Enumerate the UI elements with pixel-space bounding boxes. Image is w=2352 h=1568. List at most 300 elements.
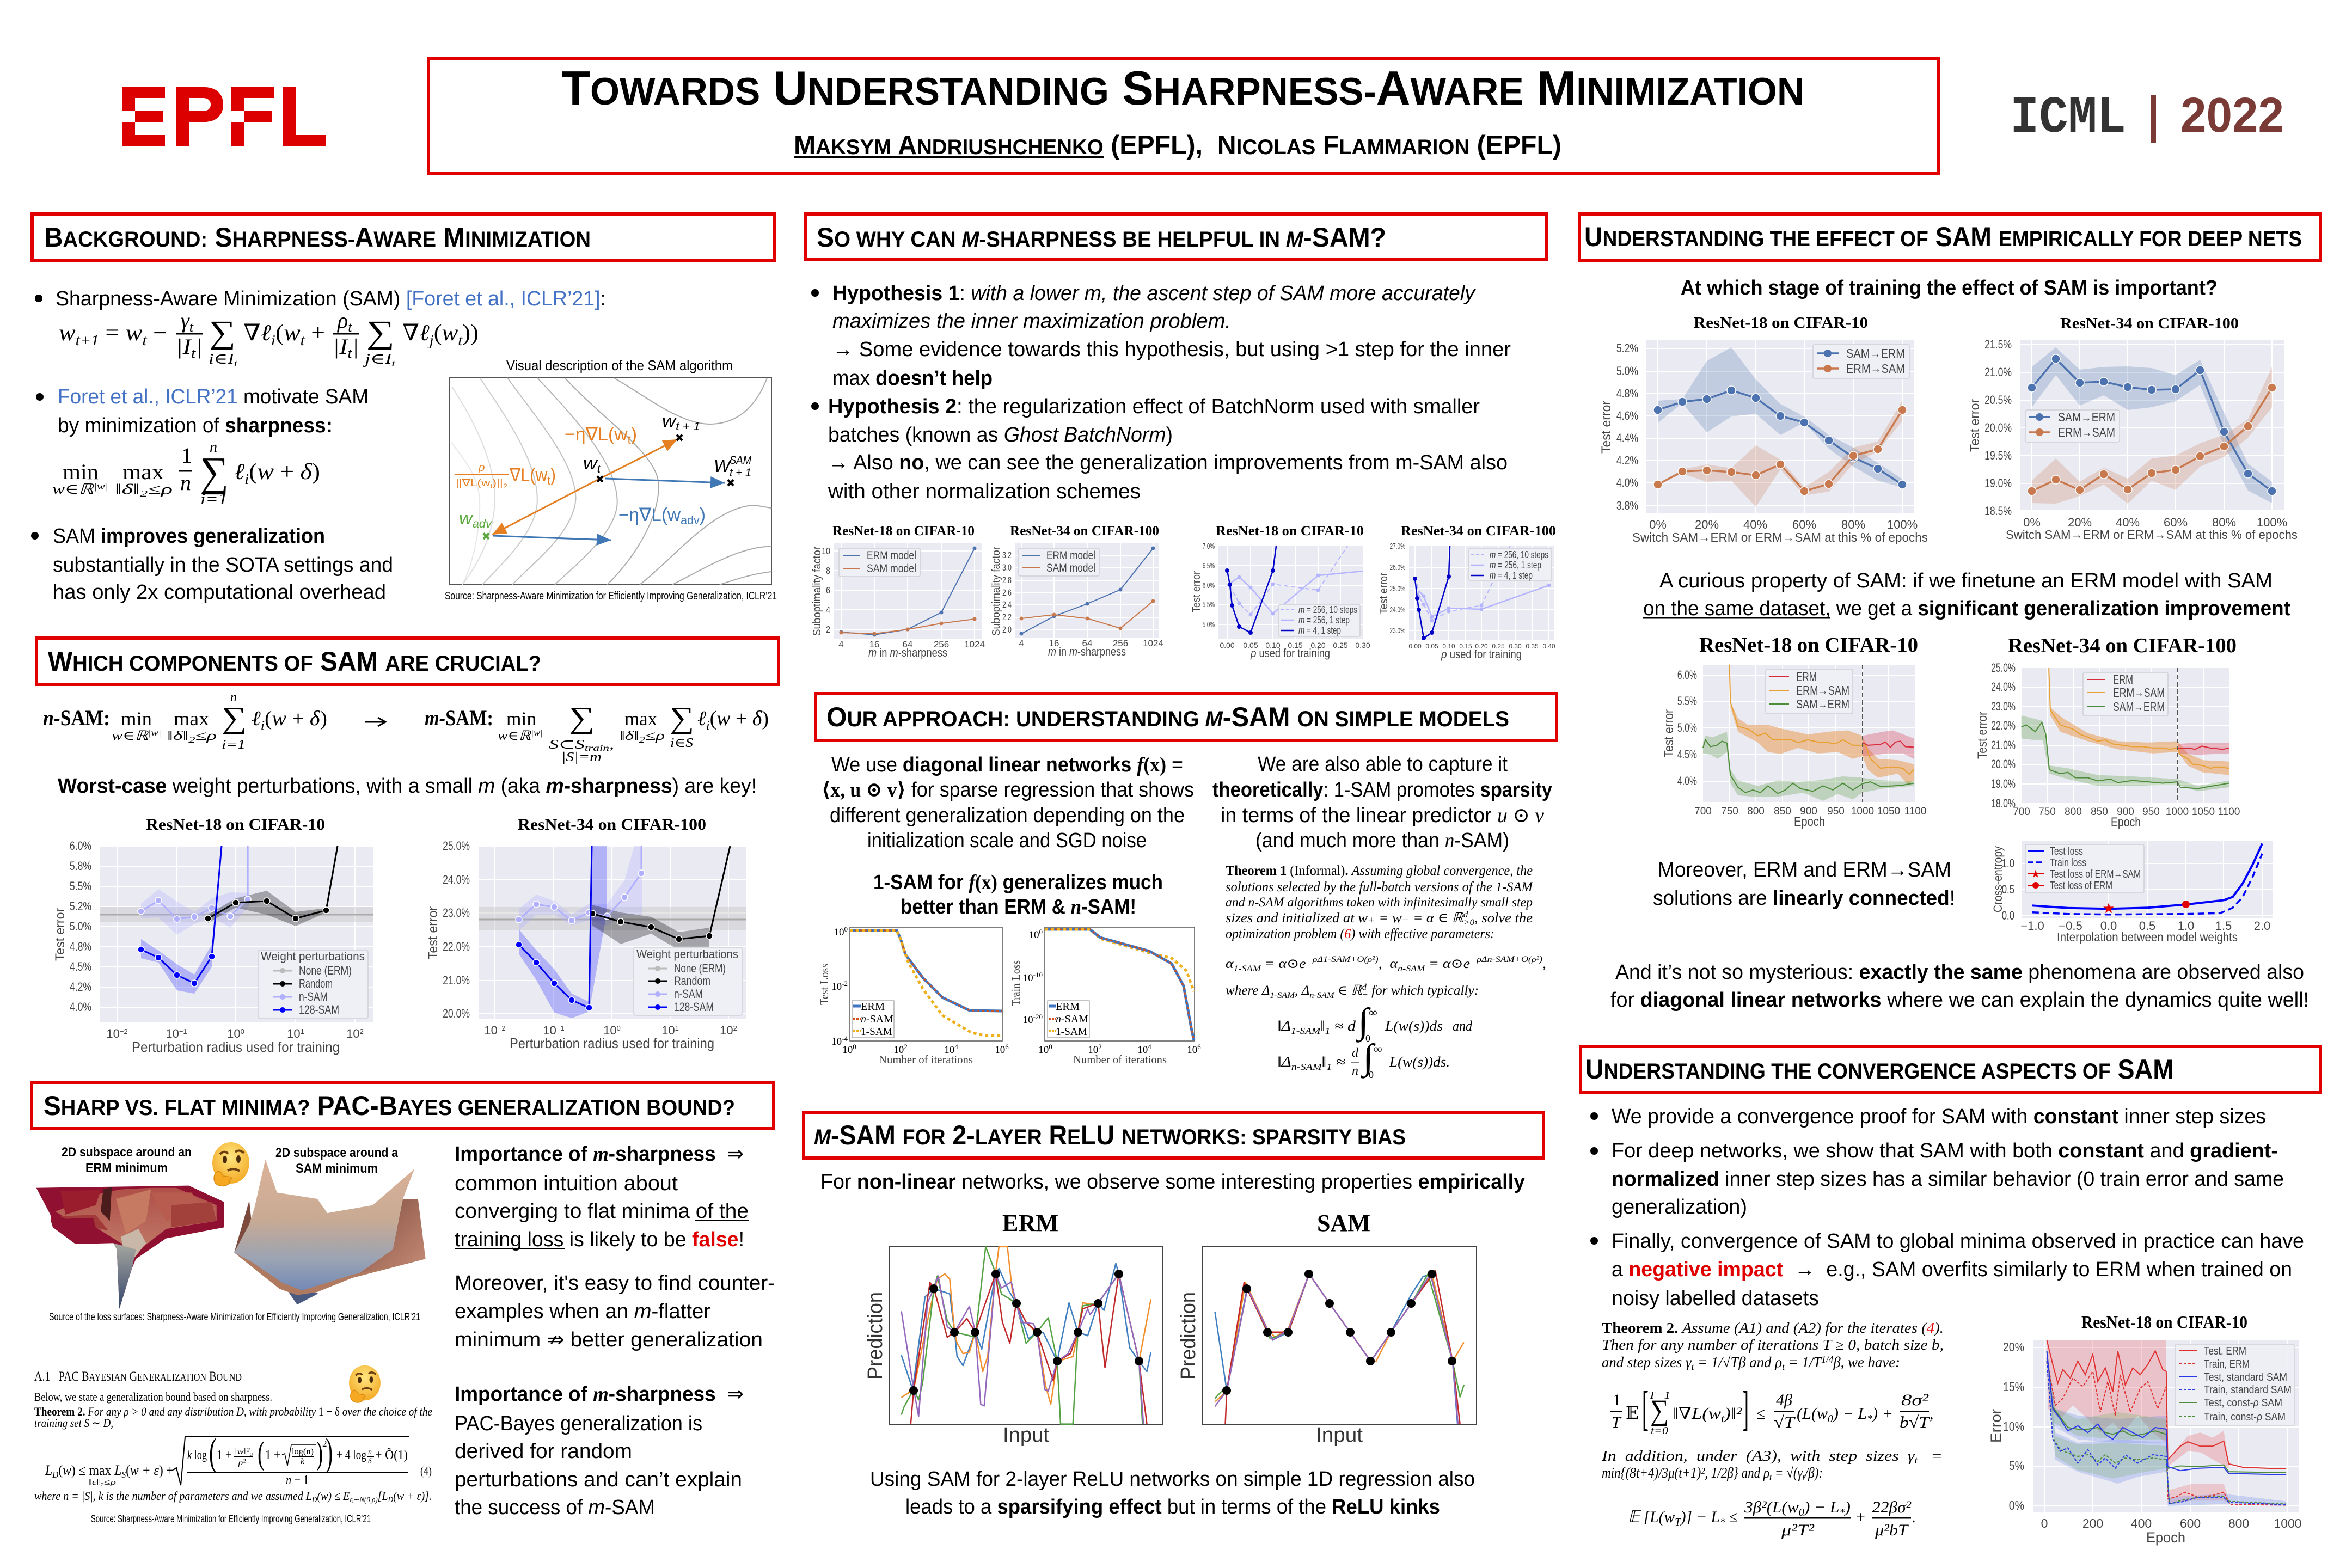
chart: test error vs perturbation radius, ResNet-18: 2 bbox=[360, 1027, 364, 1036]
formula: n-SAM: min bbox=[121, 708, 152, 730]
chart: train loss: -10 bbox=[1033, 971, 1043, 979]
chart: test error vs perturbation radius, ResNet-34: 10 bbox=[603, 1024, 617, 1037]
chart: rho vs test error ResNet-18: 7.0% bbox=[1203, 542, 1215, 551]
theorem: PAC-Bayes bound: (4) bbox=[420, 1464, 432, 1478]
chart: finetuning ResNet-34: 750 bbox=[2038, 806, 2056, 818]
formula: m-SAM: m-SAM: bbox=[425, 706, 493, 730]
text: hypothesis 2: batches (known as Ghost BatchNorm) bbox=[828, 424, 1173, 446]
formula: SAM update: t bbox=[189, 319, 194, 335]
chart: finetuning ResNet-34: 19.0% bbox=[1991, 778, 2016, 791]
bullet: negative impact: a negative impact → e.g., SAM overfits similarly to ERM when trained on bbox=[1612, 1258, 2292, 1281]
icon: thinking emoji bbox=[212, 1142, 249, 1186]
chart: cross-entropy interpolation: 0.5 bbox=[2002, 883, 2014, 897]
formula: 1-SAM integral: and bbox=[1453, 1018, 1473, 1034]
chart: test error vs perturbation radius, ResNet-18: 10 bbox=[287, 1027, 301, 1040]
arrow: gradient toward w_adv bbox=[492, 479, 600, 535]
legend: SAM→ERM bbox=[2113, 700, 2165, 714]
legend: ERM→SAM bbox=[1796, 683, 1849, 697]
theorem 1: >0 bbox=[1463, 917, 1474, 927]
chart: switch point ResNet-18: 4.4% bbox=[1616, 432, 1638, 445]
formula: SAM update: j∈I bbox=[365, 351, 384, 367]
text: generalization claim: better than ERM & n-SAM! bbox=[901, 896, 1136, 918]
chart: test error vs perturbation radius, ResNet-34: 23.0% bbox=[443, 906, 470, 920]
legend: n-SAM bbox=[299, 990, 328, 1003]
chart: switch point ResNet-18: 60% bbox=[1792, 518, 1816, 531]
chart: suboptimality ResNet-34: 3.2 bbox=[1002, 550, 1012, 561]
labels: ||∇L(w bbox=[456, 477, 483, 488]
formula: 1-SAM integral bbox=[1277, 1001, 1473, 1044]
panel: understanding effect empirically bbox=[1579, 214, 2320, 1012]
legend bbox=[258, 950, 368, 1019]
formula: SAM update: w bbox=[59, 321, 74, 346]
chart: suboptimality ResNet-34 bbox=[990, 524, 1163, 658]
chart: switch point ResNet-18: 4.8% bbox=[1616, 387, 1638, 401]
theorem 1: Theorem 1 (Informal). Assuming global convergence, the bbox=[1226, 863, 1533, 878]
theorem 1: = α⊙e bbox=[1261, 957, 1306, 971]
chart title: ResNet-34 on CIFAR-100 bbox=[1010, 524, 1159, 538]
chart: test error vs perturbation radius, ResNet-18: 10 bbox=[166, 1027, 179, 1040]
formula: m-SAM: S⊂S bbox=[549, 738, 573, 752]
chart: switch point ResNet-34: 20.0% bbox=[1984, 421, 2012, 435]
theorem: PAC-Bayes bound: training set S ∼ D, bbox=[34, 1416, 113, 1430]
text: linearly connected bbox=[1653, 859, 1955, 910]
formula: m-SAM: |w| bbox=[531, 728, 543, 738]
panel: convergence aspects bbox=[1581, 1046, 2320, 1546]
formula: 1-SAM integral: L(w(s))ds bbox=[1385, 1018, 1443, 1034]
labels: −η∇L(w bbox=[618, 505, 682, 525]
theorem 2: = bbox=[1918, 1448, 1943, 1464]
chart: noisy labels error: 5% bbox=[2009, 1459, 2024, 1473]
title: TOWARDS UNDERSTANDING SHARPNESS-AWARE MINIMIZATION bbox=[561, 61, 1804, 115]
chart title: ResNet-34 on CIFAR-100 bbox=[1401, 524, 1556, 538]
chart: test error vs perturbation radius, ResNet-34: 2 bbox=[733, 1024, 737, 1032]
chart: test loss: 10 bbox=[842, 1044, 853, 1056]
chart: test error vs perturbation radius, ResNet-34: 10 bbox=[661, 1024, 675, 1037]
legend: m = 256, 1 step bbox=[1490, 560, 1541, 571]
chart: switch point ResNet-18: Test error bbox=[1599, 401, 1614, 454]
bullet: deep networks: For deep networks, we show that SAM with both constant and gradient- bbox=[1612, 1140, 2278, 1162]
chart: switch point ResNet-18: 100% bbox=[1887, 518, 1918, 531]
chart: noisy labels error: 600 bbox=[2180, 1516, 2201, 1530]
caption: SAM: 2D subspace around a bbox=[275, 1146, 399, 1160]
theorem: PAC-Bayes bound: L bbox=[45, 1462, 53, 1478]
chart: rho vs test error ResNet-18 bbox=[1191, 524, 1370, 660]
text: hypothesis 2: Hypothesis 2: the regularization effect of BatchNorm used with smaller bbox=[828, 395, 1480, 418]
chart: suboptimality ResNet-34: 1024 bbox=[1143, 638, 1163, 648]
formula: expected gradient bound: 4β bbox=[1776, 1391, 1792, 1409]
legend: SAM model bbox=[1046, 562, 1095, 574]
bullet: negative impact: noisy labelled datasets bbox=[1612, 1287, 1819, 1310]
chart: switch point ResNet-18: 5.2% bbox=[1616, 342, 1638, 356]
chart title: ResNet-18 on CIFAR-10 bbox=[2081, 1312, 2247, 1332]
theorem 2: t bbox=[1692, 1361, 1695, 1372]
chart: cross-entropy interpolation: −0.5 bbox=[2059, 919, 2082, 933]
theorem: PAC-Bayes bound: D bbox=[311, 1496, 317, 1504]
theorem: PAC-Bayes bound: D bbox=[388, 1496, 394, 1504]
chart: test loss: -4 bbox=[842, 1034, 848, 1043]
chart: test loss: 10 bbox=[944, 1044, 954, 1056]
theorem 1: , solve the bbox=[1474, 911, 1533, 926]
theorem 2: and step sizes γ bbox=[1602, 1354, 1692, 1370]
legend: ERM bbox=[861, 1001, 885, 1013]
legend: Test, standard SAM bbox=[2204, 1371, 2287, 1383]
chart: finetuning ResNet-34: 1100 bbox=[2218, 806, 2240, 818]
formula: sharpness minimization: ≤ρ bbox=[148, 481, 173, 497]
legend bbox=[634, 947, 742, 1015]
chart: switch point ResNet-18: 20% bbox=[1695, 518, 1719, 531]
text: sparsifying effect: leads to a sparsifying effect but in terms of the ReLU kinks bbox=[905, 1496, 1440, 1518]
legend bbox=[1019, 548, 1099, 576]
theorem 2: t bbox=[1782, 1361, 1785, 1372]
chart: test error vs perturbation radius, ResNet-34: 10 bbox=[720, 1024, 733, 1037]
panel: our approach bbox=[816, 694, 1557, 1080]
chart: finetuning ResNet-34: 700 bbox=[2013, 806, 2030, 818]
chart: rho vs test error ResNet-34: 0.10 bbox=[1442, 642, 1455, 650]
formula: expected gradient bound: 0 bbox=[1828, 1413, 1833, 1425]
formula: n-SAM integral: n bbox=[1352, 1064, 1358, 1078]
chart: test error vs perturbation radius, ResNet-18: 5.8% bbox=[70, 860, 91, 873]
text: importance of m-sharpness, flat minima: common intuition about bbox=[455, 1172, 678, 1195]
chart: train loss: -20 bbox=[1033, 1013, 1043, 1021]
chart: test error vs perturbation radius, ResNet-18: 5.5% bbox=[70, 880, 91, 893]
text: importance of m-sharpness, PAC-Bayes: derived for random bbox=[455, 1440, 632, 1463]
formula: sharpness minimization: ( bbox=[249, 460, 258, 485]
chart title: SAM bbox=[1317, 1210, 1370, 1236]
chart: test error vs perturbation radius, ResNet-18: −1 bbox=[179, 1027, 187, 1036]
chart: switch point ResNet-34: 20.5% bbox=[1984, 394, 2012, 407]
legend: Test loss bbox=[2050, 846, 2083, 857]
formula: m-SAM: , bbox=[609, 738, 614, 752]
formula: expected gradient bound: 8σ² bbox=[1901, 1391, 1929, 1409]
text: linearly connected: Moreover, ERM and ERM→SAM bbox=[1658, 859, 1951, 881]
panel: which components bbox=[36, 638, 779, 1055]
legend: ERM bbox=[1796, 670, 1817, 684]
chart: rho vs test error ResNet-18: Test error bbox=[1191, 571, 1203, 612]
chart: rho vs test error ResNet-18: 0.20 bbox=[1310, 641, 1326, 650]
chart title: ResNet-34 on CIFAR-100 bbox=[2008, 634, 2237, 657]
chart: suboptimality ResNet-34: 4 bbox=[1019, 638, 1024, 648]
chart: suboptimality ResNet-34: 64 bbox=[1082, 638, 1092, 648]
logo: EPFL bbox=[122, 87, 326, 146]
caption: ERM bbox=[62, 1145, 192, 1175]
chart: suboptimality ResNet-34: 2.4 bbox=[1002, 600, 1012, 610]
chart: rho vs test error ResNet-18: 0.05 bbox=[1243, 641, 1258, 650]
chart: test error vs perturbation radius, ResNet-18: 4.2% bbox=[70, 981, 91, 994]
chart: test error vs perturbation radius, ResNet-34: −1 bbox=[556, 1024, 565, 1032]
formula: numerator under root: ‖w‖²₂ bbox=[234, 1446, 253, 1456]
chart: suboptimality ResNet-18: 4 bbox=[838, 639, 844, 650]
data points bbox=[914, 1274, 1139, 1391]
subheading: stage of training: At which stage of training the effect of SAM is important? bbox=[1681, 277, 2218, 299]
legend: m = 256, 10 steps bbox=[1298, 604, 1357, 615]
legend: Weight perturbations bbox=[261, 950, 365, 963]
chart title: ResNet-18 on CIFAR-10 bbox=[832, 524, 975, 538]
chart: rho vs test error ResNet-34 bbox=[1378, 524, 1556, 661]
formula: n-SAM: ℓ bbox=[252, 707, 260, 730]
chart: rho vs test error ResNet-18: 6.0% bbox=[1203, 581, 1215, 590]
formula: SAM update: + bbox=[305, 321, 325, 346]
formula: m-SAM bbox=[425, 701, 769, 764]
legend: Train, ERM bbox=[2204, 1358, 2250, 1370]
formula: SAM update: t bbox=[191, 345, 196, 361]
chart: suboptimality ResNet-18: 64 bbox=[903, 639, 912, 650]
legend: None (ERM) bbox=[299, 964, 352, 977]
legend: Test loss of ERM→SAM bbox=[2050, 868, 2141, 880]
formula: SAM update: i∈I bbox=[209, 351, 228, 367]
chart: finetuning ResNet-18: 6.0% bbox=[1677, 669, 1697, 682]
formula: n-SAM: i=1 bbox=[222, 738, 246, 752]
legend: m = 256, 1 step bbox=[1298, 615, 1350, 626]
labels: ) bbox=[631, 424, 637, 445]
formula: n-SAM: max bbox=[174, 708, 209, 730]
formula: SAM update: i bbox=[271, 332, 275, 348]
text: counterexamples: minimum ⇏ better generalization bbox=[455, 1328, 763, 1351]
formula: 1-SAM integral: ∫ bbox=[1356, 1001, 1371, 1043]
chart: noisy labels error: Epoch bbox=[2146, 1529, 2185, 1546]
formula: m-SAM: ∑ bbox=[670, 701, 694, 735]
formula: expected gradient bound: √T bbox=[1774, 1413, 1796, 1431]
chart: rho vs test error ResNet-34: 0.15 bbox=[1459, 642, 1472, 650]
formula: numerator under root: 1 + bbox=[265, 1448, 280, 1462]
labels: SAM bbox=[730, 454, 751, 467]
theorem 1: ∈ ℝ bbox=[1334, 983, 1363, 998]
chart: test error vs perturbation radius, ResNet-34: Test error bbox=[426, 906, 440, 959]
chart: switch point ResNet-34: Test error bbox=[1968, 399, 1982, 452]
chart: suboptimality ResNet-18: 8 bbox=[826, 566, 830, 576]
formula: sharpness minimization: min bbox=[63, 460, 99, 484]
theorem 1: , Δ bbox=[1295, 983, 1309, 998]
chart: suboptimality ResNet-18: 4 bbox=[826, 605, 830, 615]
formula: n-SAM integral bbox=[1277, 1037, 1450, 1080]
text: diagonal linear networks: initialization scale and SGD noise bbox=[867, 829, 1147, 852]
formula: 1-SAM integral: ∞ bbox=[1369, 1006, 1377, 1019]
chart: switch point ResNet-18 bbox=[1599, 314, 1928, 544]
chart: switch point ResNet-34: 40% bbox=[2116, 516, 2140, 529]
chart: suboptimality ResNet-34: m in m-sharpness bbox=[1048, 645, 1126, 658]
formula: n-SAM: ∑ bbox=[222, 701, 247, 735]
formula: n-SAM integral: ∫ bbox=[1361, 1037, 1376, 1079]
chart: rho vs test error ResNet-18: 5.0% bbox=[1203, 620, 1215, 629]
chart: rho vs test error ResNet-34: 0.40 bbox=[1542, 642, 1555, 650]
legend: 1-SAM bbox=[1056, 1026, 1087, 1038]
chart: finetuning ResNet-18: 750 bbox=[1721, 806, 1738, 817]
formula: convergence rate: * bbox=[1720, 1517, 1725, 1528]
formula: expected gradient bound: T bbox=[1612, 1413, 1622, 1431]
legend bbox=[2083, 672, 2168, 716]
figure caption: title: Visual description of the SAM algorithm bbox=[506, 357, 733, 373]
chart: suboptimality ResNet-18: 6 bbox=[826, 585, 830, 596]
formula: expected gradient bound: ‖∇L(w bbox=[1673, 1405, 1714, 1423]
panel: 2-layer ReLU networks bbox=[804, 1112, 1543, 1518]
text: not so mysterious: And it’s not so mysterious: exactly the same phenomena are observed also bbox=[1615, 961, 2304, 984]
legend: Test loss of ERM bbox=[2050, 880, 2112, 892]
text: hypothesis 2: → Also no, we can see the generalization improvements from m-SAM also bbox=[828, 451, 1508, 474]
chart: test loss: Number of iterations bbox=[879, 1053, 973, 1066]
theorem: PAC-Bayes bound: (w) ≤ E bbox=[317, 1489, 350, 1503]
legend bbox=[2175, 1344, 2294, 1426]
chart: switch point ResNet-18: 0% bbox=[1649, 518, 1667, 531]
text: hypothesis 1: max doesn’t help bbox=[832, 367, 993, 390]
formula: convergence rate: 0 bbox=[1799, 1507, 1804, 1518]
labels: t bbox=[597, 463, 601, 475]
figure: loss surfaces bbox=[36, 1142, 426, 1323]
legend: ERM→SAM bbox=[2113, 685, 2165, 700]
theorem: PAC-Bayes bound: A.1 PAC BAYESIAN GENERALIZATION BOUND bbox=[34, 1369, 242, 1384]
chart: test loss: 6 bbox=[1005, 1043, 1009, 1051]
chart: finetuning ResNet-18: 4.5% bbox=[1677, 749, 1697, 762]
formula: n-SAM integral: ‖Δ bbox=[1277, 1054, 1289, 1070]
chart: train loss: 0 bbox=[1039, 928, 1043, 936]
formula: n-SAM integral: L(w(s))ds. bbox=[1389, 1054, 1450, 1070]
chart: SAM predictions: Input bbox=[1316, 1424, 1363, 1447]
chart: finetuning ResNet-18: Test error bbox=[1662, 709, 1676, 757]
chart: finetuning ResNet-34 bbox=[1975, 634, 2240, 830]
legend: n-SAM bbox=[861, 1013, 893, 1025]
chart: test error vs perturbation radius, ResNet-18 bbox=[53, 816, 373, 1055]
chart: switch point ResNet-34: 0% bbox=[2023, 516, 2041, 529]
chart: suboptimality ResNet-18: Suboptimality factor bbox=[811, 547, 823, 636]
chart: finetuning ResNet-34: 22.0% bbox=[1991, 720, 2016, 733]
theorem 2: t bbox=[1914, 1455, 1919, 1466]
surface: SAM bbox=[234, 1160, 426, 1304]
text: diagonal linear networks: We use diagonal linear networks f(x) = bbox=[831, 754, 1183, 776]
formula: convergence rate: μ²T² bbox=[1781, 1521, 1815, 1539]
caption: ERM: ERM minimum bbox=[85, 1161, 168, 1175]
formula: convergence rate bbox=[1628, 1498, 1915, 1539]
formula: SAM update: − bbox=[147, 321, 167, 346]
formula: m-SAM: ∑ bbox=[569, 701, 595, 735]
theorem: PAC-Bayes bound: Below, we state a generalization bound based on sharpness. bbox=[34, 1390, 272, 1404]
bullet: generalization: SAM improves generalization bbox=[53, 525, 325, 548]
text: counterexamples: Moreover, it's easy to find counter- bbox=[455, 1272, 775, 1295]
formula: numerator under root: ) bbox=[316, 1435, 323, 1471]
points: ✖ bbox=[675, 432, 684, 444]
theorem: PAC-Bayes bound: where n = |S|, k is the number of parameters and we assumed L bbox=[34, 1489, 339, 1503]
legend: Test, const-ρ SAM bbox=[2204, 1397, 2282, 1409]
chart: suboptimality ResNet-34: 16 bbox=[1049, 638, 1059, 648]
text: diagonal linear networks bbox=[822, 754, 1194, 852]
legend bbox=[1279, 604, 1360, 636]
formula: expected gradient bound: t bbox=[1721, 1413, 1725, 1425]
formula: expected gradient bound: , bbox=[1930, 1405, 1934, 1423]
formula: sharpness minimization: ℓ bbox=[234, 460, 244, 485]
labels: W bbox=[714, 456, 732, 476]
chart: test error vs perturbation radius, ResNet-34: 10 bbox=[543, 1024, 556, 1037]
formula: n-SAM integral: 1 bbox=[1326, 1062, 1332, 1072]
text: not so mysterious bbox=[1610, 961, 2309, 1012]
formula: convergence rate: ≤ bbox=[1725, 1508, 1738, 1526]
formula: n-SAM: n-SAM: bbox=[43, 706, 110, 730]
formula: SAM update: = bbox=[99, 321, 126, 346]
chart title: ResNet-18 on CIFAR-10 bbox=[1216, 524, 1364, 538]
legend: None (ERM) bbox=[674, 961, 726, 975]
formula: n-SAM integral: n-SAM bbox=[1291, 1062, 1322, 1072]
formula: m-SAM: ‖δ‖ bbox=[620, 729, 633, 743]
theorem 1: −ρΔ1-SAM+O(ρ²) bbox=[1306, 954, 1379, 964]
formula: SAM update: w bbox=[284, 321, 299, 346]
labels bbox=[455, 411, 751, 530]
formula: convergence rate: ) bbox=[1843, 1498, 1851, 1516]
formula: n-SAM: w∈ℝ bbox=[112, 729, 140, 743]
chart: finetuning ResNet-18: 950 bbox=[1827, 806, 1845, 817]
chart: test loss: 10 bbox=[834, 927, 844, 938]
chart title: ResNet-18 on CIFAR-10 bbox=[1694, 314, 1868, 332]
formula: n-SAM integral: ≈ bbox=[1332, 1054, 1345, 1070]
formula: expected gradient bound: T−1 bbox=[1649, 1389, 1670, 1401]
chart: test loss: Test Loss bbox=[818, 964, 831, 1005]
legend: ERM→SAM bbox=[2058, 425, 2115, 439]
chart: rho vs test error ResNet-34: 0.20 bbox=[1475, 642, 1488, 650]
chart: switch point ResNet-34: 19.0% bbox=[1984, 477, 2012, 491]
chart: switch point ResNet-34: 18.5% bbox=[1984, 505, 2012, 518]
formula: 1-SAM integral: 1-SAM bbox=[1291, 1026, 1321, 1036]
chart: switch point ResNet-18: 80% bbox=[1841, 518, 1865, 531]
theorem 2: = 1/T bbox=[1785, 1354, 1822, 1370]
theorem 1: 1-SAM bbox=[1270, 990, 1295, 1000]
logo: ICML 2022 bbox=[2010, 88, 2284, 148]
formula: expected gradient bound: * bbox=[1867, 1413, 1872, 1425]
legend: 1-SAM bbox=[861, 1026, 892, 1038]
theorem: PAC-Bayes bound: Theorem 2. For any ρ > 0 and any distribution D, with probability 1 − δ over the choice of the bbox=[34, 1405, 432, 1418]
chart: switch point ResNet-34: 100% bbox=[2257, 516, 2287, 529]
chart: suboptimality ResNet-18: 16 bbox=[869, 639, 879, 650]
chart: test error vs perturbation radius, ResNet-34: 20.0% bbox=[443, 1007, 470, 1021]
legend bbox=[852, 1001, 894, 1038]
formula: SAM update: t bbox=[142, 332, 148, 348]
formula: m-SAM: w + δ) bbox=[716, 707, 769, 730]
chart: train loss: 10 bbox=[1038, 1044, 1049, 1056]
formula: SAM update: ∇ℓ bbox=[402, 321, 429, 346]
theorem 1 bbox=[1226, 863, 1546, 1080]
theorem 1: , α bbox=[1379, 957, 1398, 971]
points bbox=[482, 432, 735, 543]
chart: train loss: 2 bbox=[1098, 1043, 1102, 1051]
theorem 1: n-SAM bbox=[1309, 990, 1335, 1000]
chart: cross-entropy interpolation: 0.0 bbox=[2100, 919, 2117, 933]
chart: noisy labels error: 15% bbox=[2003, 1380, 2024, 1394]
legend: m = 4, 1 step bbox=[1298, 625, 1341, 636]
chart: suboptimality ResNet-18: 1024 bbox=[964, 639, 985, 650]
arrow: ascent orange bbox=[600, 439, 677, 479]
chart: test error vs perturbation radius, ResNet-18: Perturbation radius used for training bbox=[132, 1039, 340, 1055]
formula: SAM update: t+1 bbox=[76, 332, 99, 348]
text: hypothesis 2: with other normalization schemes bbox=[828, 480, 1141, 503]
chart title: ResNet-34 on CIFAR-100 bbox=[2060, 315, 2239, 332]
chart: finetuning ResNet-18: 850 bbox=[1774, 806, 1791, 817]
text: importance of m-sharpness, PAC-Bayes: perturbations and can’t explain bbox=[455, 1468, 742, 1491]
theorem 1: d bbox=[1362, 982, 1367, 992]
formula: SAM update: ( bbox=[434, 321, 442, 346]
labels: ∇L(w bbox=[510, 465, 552, 486]
formula: n-SAM: 2 bbox=[188, 736, 195, 745]
formula: n-SAM bbox=[43, 690, 327, 752]
heading: background: BACKGROUND: SHARPNESS-AWARE MINIMIZATION bbox=[44, 222, 591, 253]
labels: ) bbox=[550, 465, 556, 486]
chart: rho vs test error ResNet-34: 23.0% bbox=[1390, 626, 1405, 635]
formula: SAM update: w bbox=[126, 321, 141, 346]
formula: m-SAM: |S|=m bbox=[561, 750, 602, 764]
formula: n-SAM: n bbox=[230, 690, 237, 705]
formula: convergence rate: T bbox=[1675, 1517, 1681, 1528]
chart: train loss: 10 bbox=[1023, 1014, 1033, 1026]
chart title: ResNet-34 on CIFAR-100 bbox=[518, 816, 706, 834]
chart: train loss: 0 bbox=[1049, 1043, 1052, 1051]
chart: switch point ResNet-18: 3.8% bbox=[1616, 499, 1638, 513]
formula: SAM update: ( bbox=[275, 321, 284, 346]
formula: numerator under root: 2 bbox=[322, 1438, 327, 1449]
chart: train loss: 10 bbox=[1137, 1044, 1148, 1056]
formula: SAM update: t bbox=[347, 345, 352, 361]
